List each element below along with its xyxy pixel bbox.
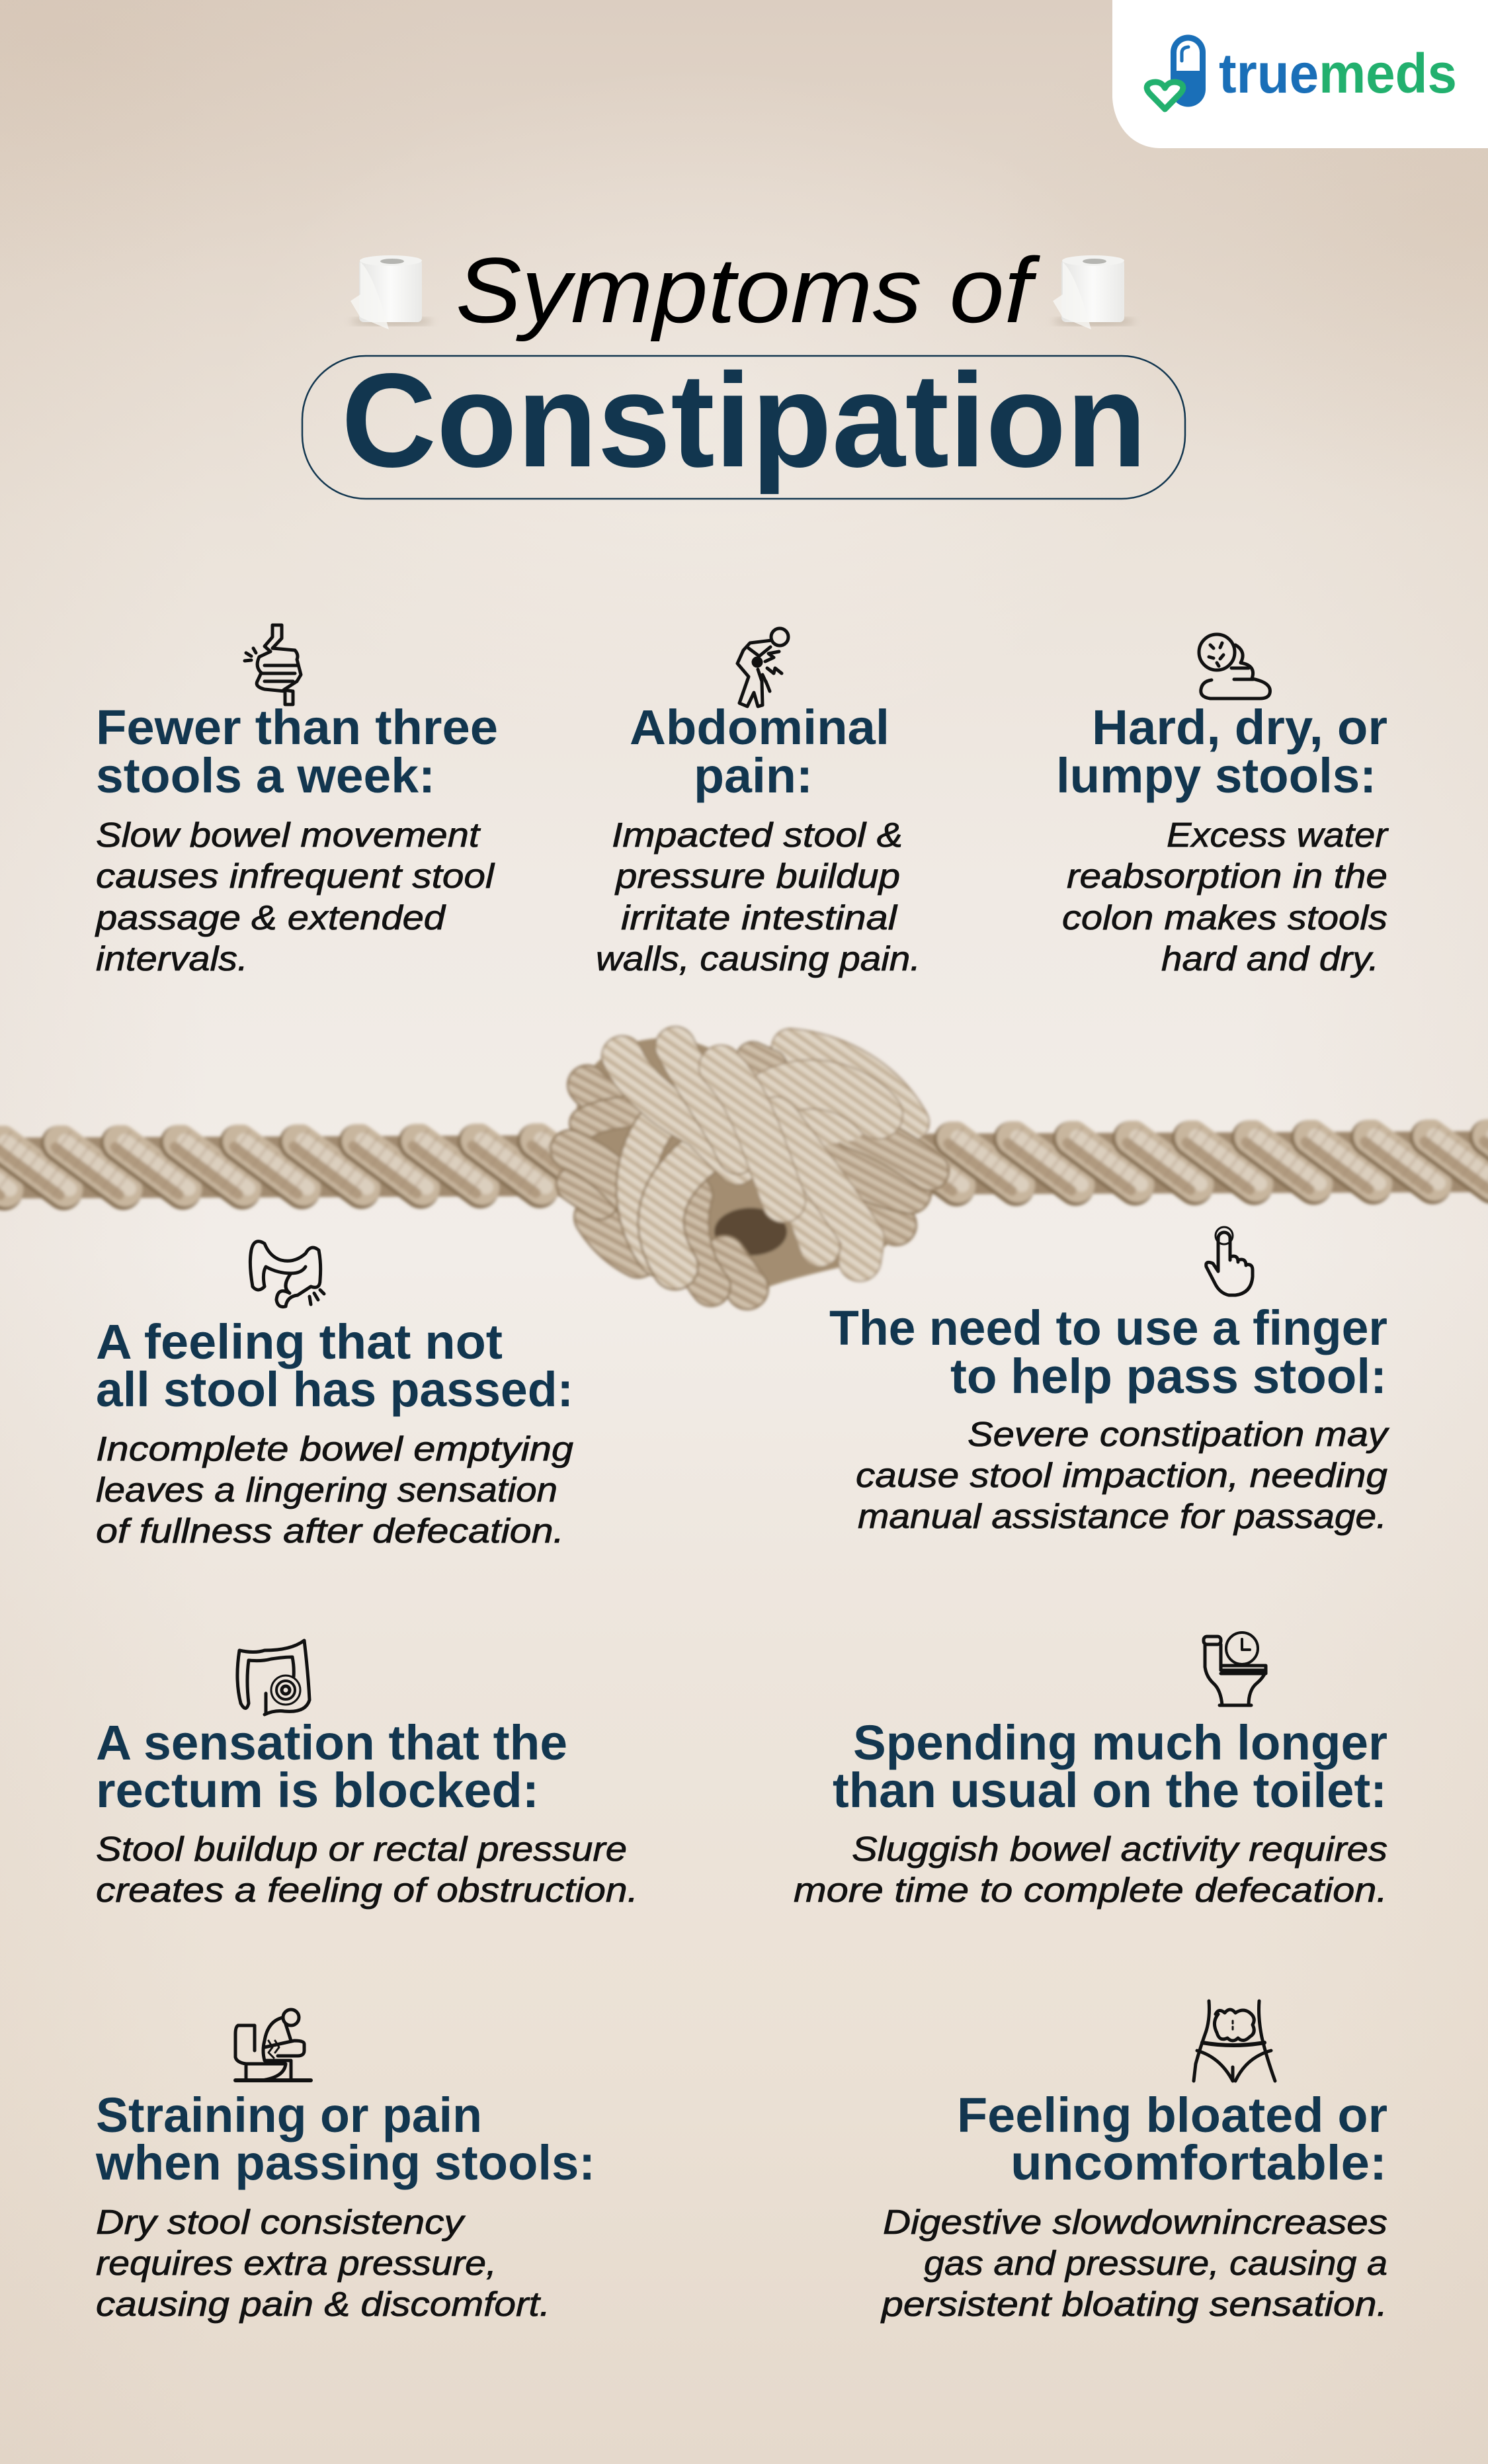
symptom: fewer than three stools: stools a week: <box>96 748 435 803</box>
symptom: straining or pain: requires extra pressure, <box>96 2244 497 2283</box>
heading: A sensation that the <box>96 1715 567 1770</box>
symptom: feeling not all stool passed: all stool has passed: <box>96 1362 573 1417</box>
symptom: need to use a finger: to help pass stool: <box>950 1349 1387 1404</box>
icon: toilet with clock <box>1204 1633 1266 1705</box>
symptom: abdominal pain <box>596 628 921 978</box>
symptom: hard dry lumpy stools: lumpy stools: <box>1056 748 1376 803</box>
rope <box>0 1119 1488 1212</box>
symptom: rectum blocked: creates a feeling of obstruction. <box>96 1871 638 1910</box>
symptom: straining or pain: causing pain & discomfort. <box>96 2285 550 2324</box>
symptom: need to use a finger: cause stool impaction, needing <box>856 1457 1387 1495</box>
symptom: feeling bloated: gas and pressure, causing a <box>924 2244 1387 2283</box>
symptom: feeling not all stool passed: leaves a lingering sensation <box>96 1471 558 1509</box>
symptom: feeling bloated: uncomfortable: <box>1011 2135 1387 2190</box>
description: Sluggish bowel activity requires <box>852 1830 1387 1869</box>
icon: capsule and heart <box>1147 34 1206 109</box>
title <box>302 238 1185 499</box>
icon: bloated belly <box>1194 2001 1275 2081</box>
symptom: fewer than three stools: causes infrequent stool <box>96 857 495 896</box>
heading: A feeling that not <box>96 1314 503 1369</box>
symptom: abdominal pain: walls, causing pain. <box>596 940 921 978</box>
symptom: abdominal pain: pain: <box>694 748 813 803</box>
description: Slow bowel movement <box>96 816 481 855</box>
pill outline with heading Constipation: Constipation <box>341 345 1147 495</box>
symptom: fewer than three stools: passage & extended <box>95 899 446 937</box>
description: Incomplete bowel emptying <box>96 1430 573 1468</box>
icon: cookie and stool <box>1199 634 1270 699</box>
logo wordmark: truemeds <box>1219 42 1457 105</box>
heading: The need to use a finger <box>829 1300 1387 1355</box>
symptom: feeling bloated: persistent bloating sensation. <box>880 2285 1387 2324</box>
symptom: straining or pain: when passing stools: <box>95 2135 595 2190</box>
icon: paper roll right <box>1053 255 1135 329</box>
symptom: feeling not all stool passed: of fullness after defecation. <box>96 1512 564 1551</box>
heading: Feeling bloated or <box>957 2088 1387 2143</box>
heading line: Symptoms of: Symptoms of <box>456 238 1040 342</box>
description: Dry stool consistency <box>96 2203 466 2242</box>
heading: Spending much longer <box>853 1715 1387 1770</box>
description: Digestive slowdownincreases <box>883 2203 1387 2242</box>
symptom: rectum blocked <box>96 1640 638 1910</box>
icon: person straining on toilet <box>235 2010 311 2080</box>
symptom: spending longer on toilet: more time to complete defecation. <box>794 1871 1387 1910</box>
icon: paper roll left <box>351 255 433 329</box>
symptom: fewer than three stools: intervals. <box>96 940 248 978</box>
rope knot <box>570 1038 929 1296</box>
symptom: hard dry lumpy stools: hard and dry. <box>1161 940 1379 978</box>
symptom: feeling bloated <box>880 2001 1387 2324</box>
heading: Abdominal <box>630 700 889 755</box>
description: Impacted stool & <box>612 816 903 855</box>
symptom: spending longer on toilet: than usual on the toilet: <box>833 1763 1387 1818</box>
symptom: feeling not all stool passed <box>96 1242 573 1551</box>
symptom: abdominal pain: irritate intestinal <box>621 899 898 937</box>
heading: Straining or pain <box>96 2088 482 2143</box>
icon: pointing hand <box>1206 1227 1253 1295</box>
symptom: rectum blocked: rectum is blocked: <box>96 1763 539 1818</box>
symptom: spending longer on toilet <box>794 1633 1387 1910</box>
symptom: fewer than three stools <box>95 625 498 978</box>
symptom: hard dry lumpy stools: reabsorption in the <box>1067 857 1387 896</box>
icon: person bent over in pain <box>737 628 788 706</box>
symptom: abdominal pain: pressure buildup <box>614 857 900 896</box>
description: Excess water <box>1167 816 1389 855</box>
symptom: hard dry lumpy stools: colon makes stools <box>1062 899 1387 937</box>
heading: Hard, dry, or <box>1092 700 1387 755</box>
symptom: straining or pain <box>95 2010 595 2324</box>
symptom: need to use a finger: manual assistance for passage. <box>858 1498 1387 1536</box>
description: Stool buildup or rectal pressure <box>96 1830 627 1869</box>
description: Severe constipation may <box>968 1416 1389 1454</box>
symptom: hard dry lumpy stools <box>1056 634 1389 978</box>
symptom: need to use a finger <box>829 1227 1389 1536</box>
icon: small intestine <box>245 625 301 704</box>
icon: large intestine <box>250 1242 324 1307</box>
icon: colon with blockage <box>237 1640 310 1715</box>
logo panel <box>1112 0 1488 148</box>
heading: Fewer than three <box>96 700 498 755</box>
